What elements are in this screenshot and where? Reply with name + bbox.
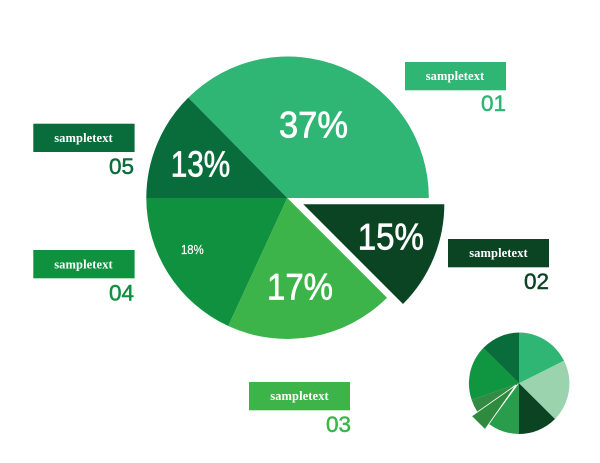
label 02: sampletext xyxy=(469,246,529,260)
label 03: sampletext xyxy=(270,389,330,403)
slice: 37% xyxy=(188,57,429,198)
label 01: 01 xyxy=(481,91,506,116)
label 04: sampletext xyxy=(54,258,114,272)
slice: 15% exploded: 15% xyxy=(358,216,424,257)
slice: 15% exploded xyxy=(303,204,444,304)
label 02 xyxy=(448,239,549,294)
label 03 xyxy=(249,382,351,437)
label 05: 05 xyxy=(109,154,134,179)
main pie chart xyxy=(146,57,444,339)
slice: 13%: 13% xyxy=(171,144,230,185)
slice: 17% xyxy=(228,198,387,339)
label 03: 03 xyxy=(326,412,351,437)
slice: 17%: 17% xyxy=(267,266,333,307)
slice: 18%: 18% xyxy=(181,243,204,257)
label 04 xyxy=(33,250,135,306)
label 02: 02 xyxy=(524,269,549,294)
label 05: sampletext xyxy=(54,131,114,145)
slice: 37%: 37% xyxy=(279,104,348,145)
slice: 13% xyxy=(146,98,287,198)
small pie icon xyxy=(469,332,569,434)
label 04: 04 xyxy=(109,280,134,306)
label 01: sampletext xyxy=(426,69,485,83)
label 05 xyxy=(33,124,135,179)
slice: 18% xyxy=(146,198,287,326)
label 01 xyxy=(405,62,506,116)
